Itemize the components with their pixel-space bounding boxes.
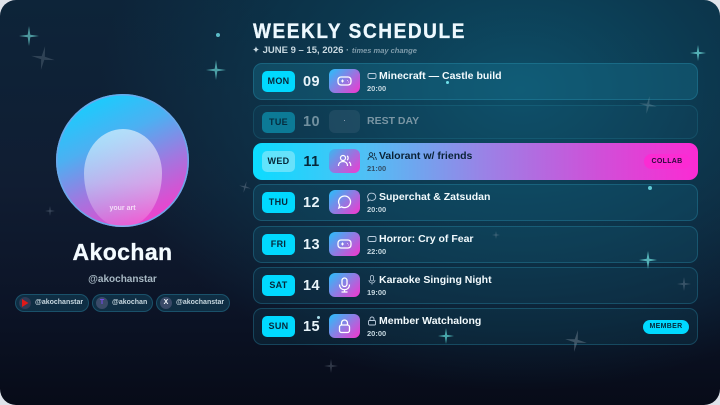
- social: youtube: @akochanstar: [35, 299, 83, 306]
- sparkle: dim left: [32, 47, 54, 69]
- time: 21:00: [367, 164, 386, 173]
- day badge: [262, 151, 295, 172]
- social: twitch: [92, 294, 153, 312]
- icon: gamepad: [329, 69, 360, 93]
- row: monday: [253, 63, 698, 100]
- day badge: THU: [269, 197, 288, 207]
- icon: lock: [329, 314, 360, 338]
- social: x: X: [164, 299, 168, 306]
- icon: people: [329, 149, 360, 173]
- icon: microphone: [329, 273, 360, 297]
- icon: chat: [329, 190, 360, 214]
- row: tuesday: [253, 105, 698, 139]
- date: 15: [303, 319, 320, 335]
- tag: collab: COLLAB: [652, 158, 682, 165]
- social: twitch: @akochan: [112, 299, 147, 306]
- dot: sunday: [317, 316, 320, 319]
- title: Karaoke Singing Night: [379, 274, 492, 286]
- day badge: [262, 112, 295, 133]
- social: youtube: [15, 294, 89, 312]
- day badge: [262, 316, 295, 337]
- title: Superchat & Zatsudan: [379, 191, 490, 203]
- sparkle: dim bottom left: [324, 360, 338, 372]
- panel: profile: [56, 94, 189, 285]
- title: Horror: Cry of Fear: [379, 233, 474, 245]
- tag: member: [643, 320, 689, 334]
- avatar caption: your art: [109, 205, 136, 212]
- sparkle: dim right: [640, 96, 656, 114]
- icon: rest: [329, 110, 360, 133]
- small title icon: [368, 152, 377, 160]
- row: saturday: [253, 267, 698, 304]
- sparkle: top left: [20, 26, 38, 46]
- time: 20:00: [367, 84, 386, 93]
- title: REST DAY: [367, 115, 419, 127]
- title: Member Watchalong: [379, 315, 481, 327]
- sparkle: small by row: [240, 182, 250, 192]
- date: 11: [303, 154, 320, 170]
- day badge: [262, 71, 295, 92]
- title: Valorant w/ friends: [379, 150, 472, 162]
- subheading: ✦ JUNE 9 – 15, 2026 · times may change: [252, 45, 417, 56]
- day badge: [262, 275, 295, 296]
- small title icon: [368, 316, 376, 326]
- row: friday: [253, 226, 698, 263]
- date: 14: [303, 278, 320, 294]
- tag: member: MEMBER: [650, 323, 682, 330]
- avatar: [56, 94, 189, 227]
- date: 09: [303, 74, 320, 90]
- sparkle: bottom: [566, 330, 586, 352]
- sparkle: top right: [690, 46, 706, 60]
- small title icon: [368, 275, 376, 284]
- sparkle: teal bottom: [438, 328, 454, 344]
- day badge: FRI: [271, 239, 286, 249]
- date: 13: [303, 237, 320, 253]
- streamer name: Akochan: [73, 239, 172, 265]
- sparkle: teal upper: [206, 60, 226, 80]
- avatar silhouette: [84, 129, 162, 227]
- dot: minecraft row: [446, 81, 449, 84]
- icon: rest: ·: [343, 115, 346, 125]
- small title icon: [367, 192, 376, 202]
- social: twitch: T: [100, 299, 104, 306]
- day badge: [262, 192, 295, 213]
- sparkle: dim near avatar: [46, 206, 54, 216]
- small title icon: [368, 236, 376, 242]
- row: wednesday highlight: [253, 143, 698, 180]
- day badge: [262, 234, 295, 255]
- sparkle: dim lower right: [678, 278, 690, 290]
- tag: collab: [644, 154, 690, 169]
- time: 20:00: [367, 329, 386, 338]
- handle: @akochanstar: [88, 274, 157, 285]
- row: sunday: [253, 308, 698, 345]
- small title icon: [368, 73, 376, 79]
- heading: WEEKLY SCHEDULE: [253, 20, 466, 44]
- sparkle: small row: [492, 232, 500, 238]
- icon: gamepad: [329, 232, 360, 256]
- day badge: WED: [268, 156, 289, 166]
- day badge: MON: [268, 76, 289, 86]
- time: 19:00: [367, 288, 386, 297]
- social: x: [156, 294, 230, 312]
- dot: right: [648, 186, 652, 190]
- date: 12: [303, 195, 320, 211]
- title: Minecraft — Castle build: [379, 70, 502, 82]
- time: 20:00: [367, 205, 386, 214]
- sparkle: teal mid right: [639, 251, 657, 269]
- day badge: TUE: [269, 117, 288, 127]
- day badge: SUN: [269, 321, 288, 331]
- time: 22:00: [367, 247, 386, 256]
- date: 10: [303, 114, 320, 130]
- social: x: @akochanstar: [176, 299, 224, 306]
- row: thursday: [253, 184, 698, 221]
- dot: top: [216, 33, 220, 37]
- day badge: SAT: [269, 280, 288, 290]
